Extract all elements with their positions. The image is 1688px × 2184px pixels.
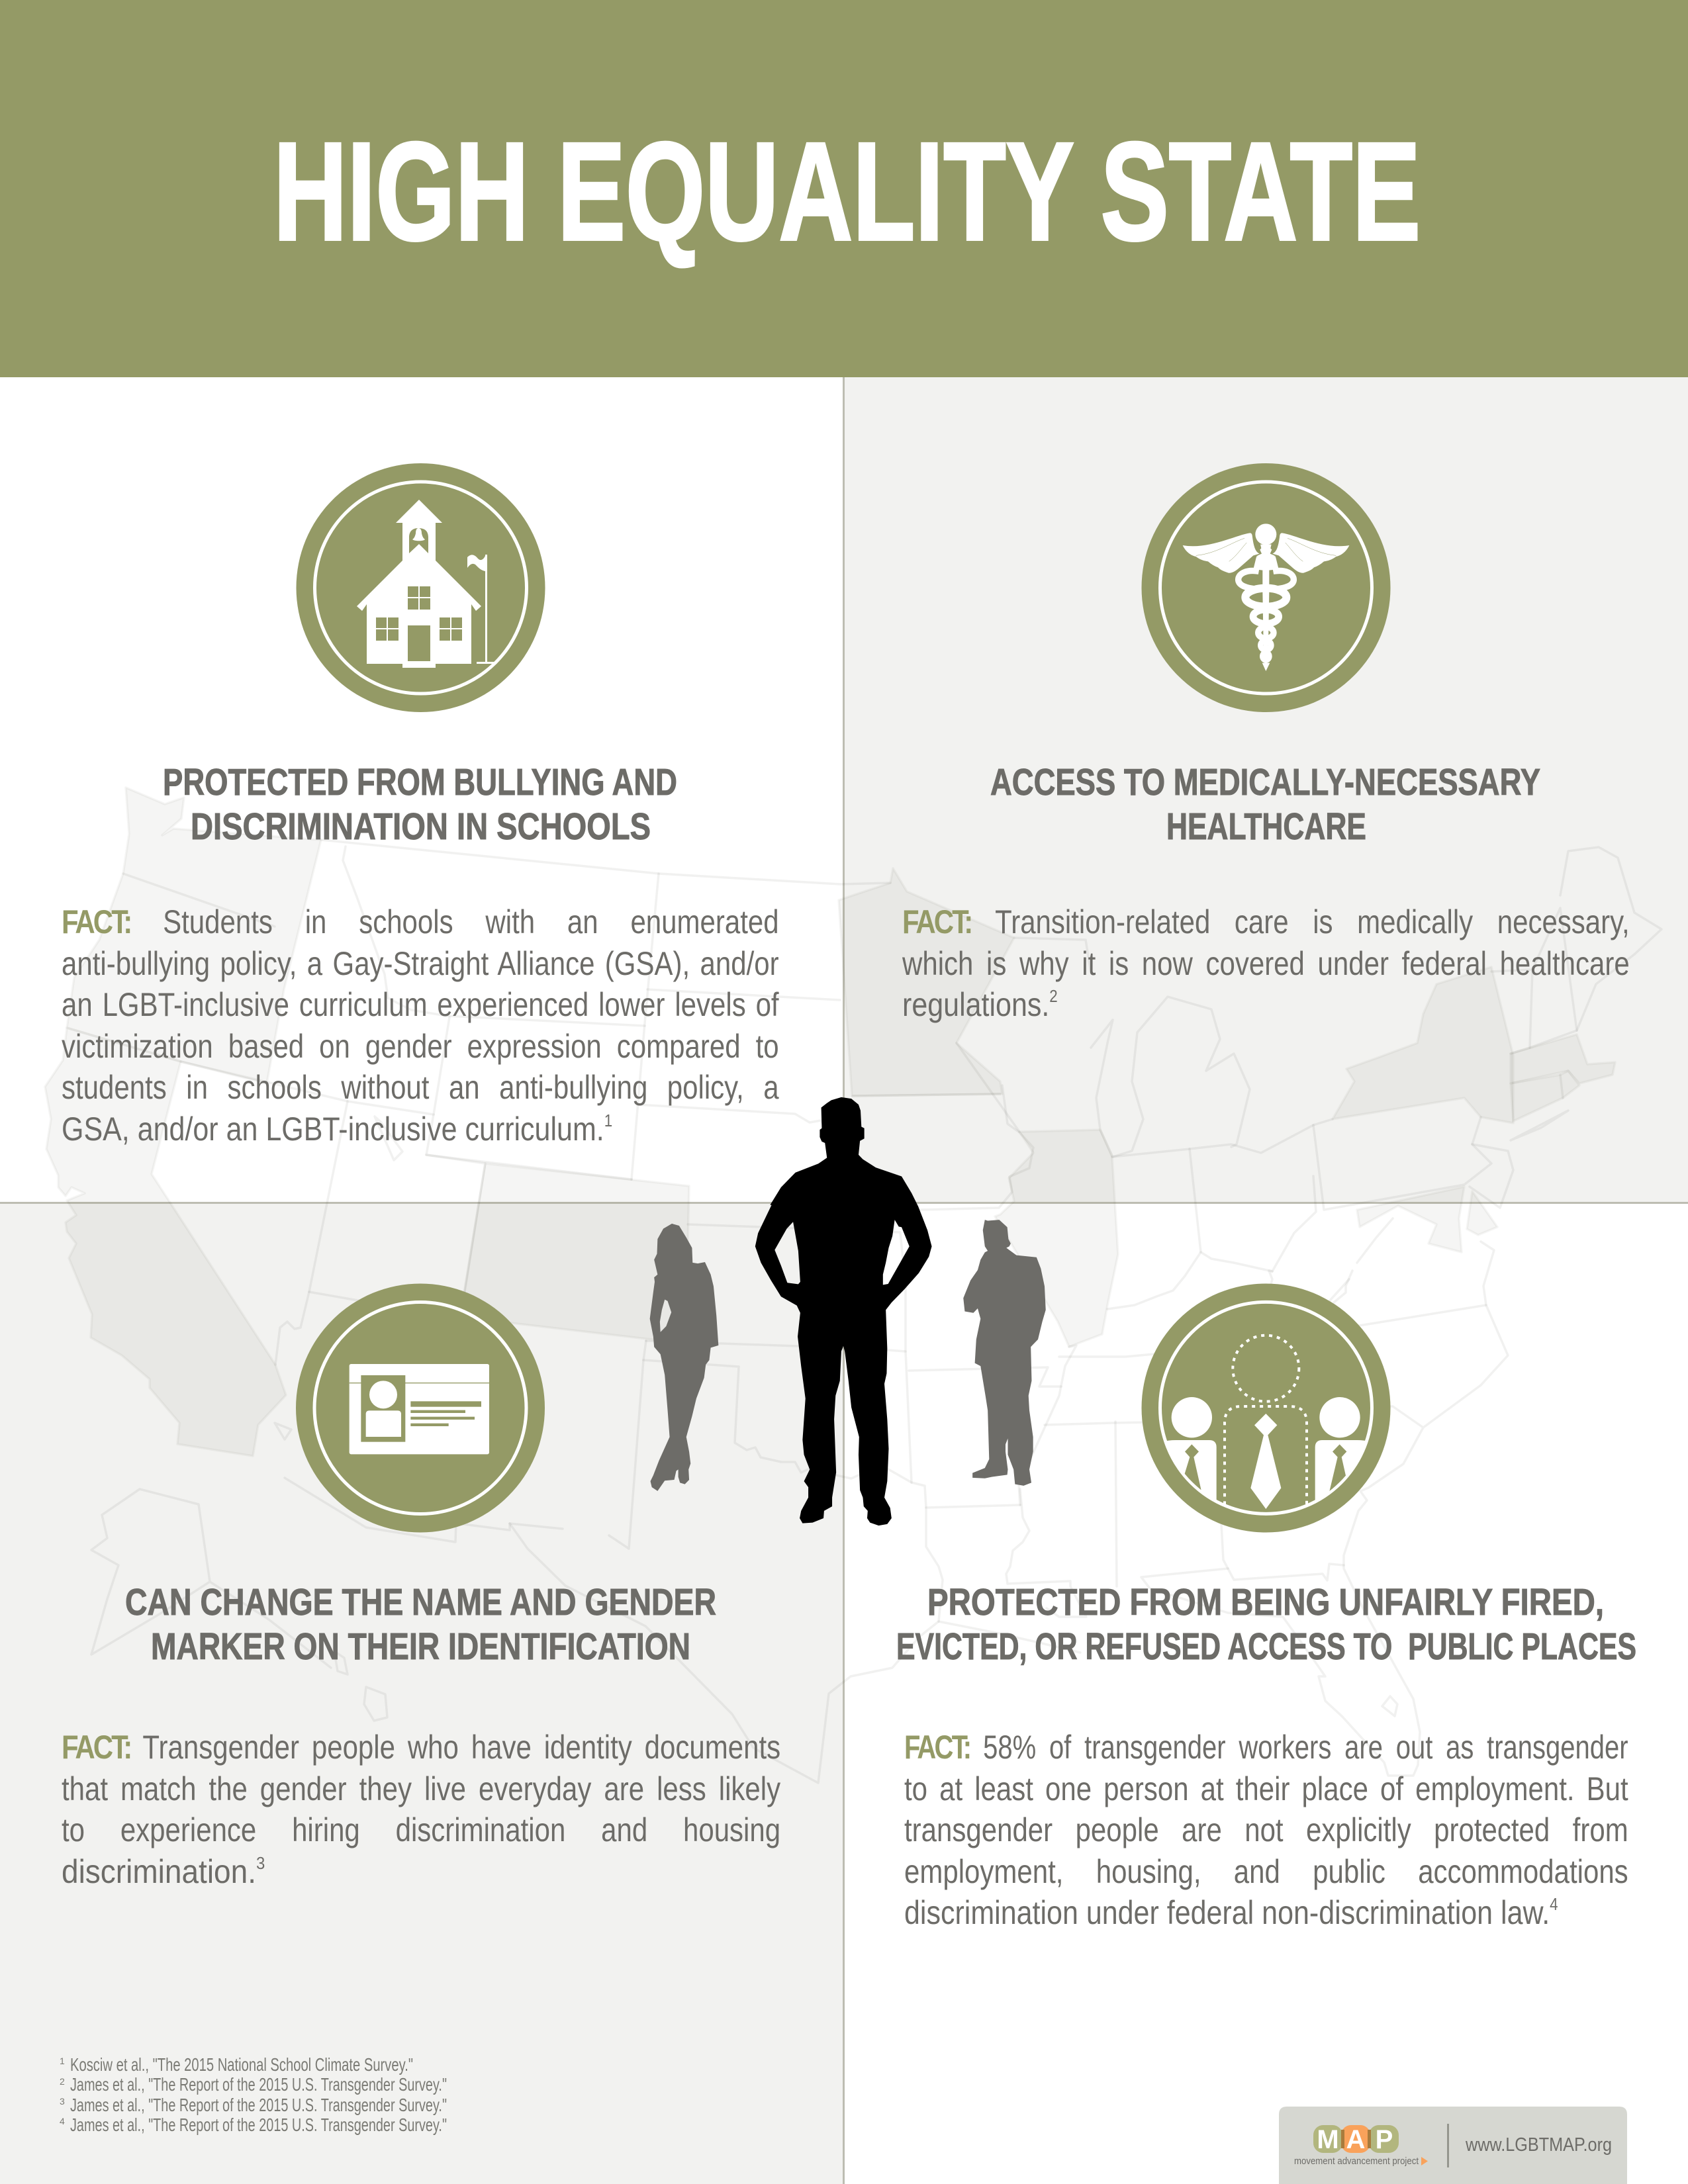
heading: healthcare: [990, 761, 1540, 848]
text block: schools fact: GSA, and/or an LGBT-inclusive curriculum.1: [62, 1111, 612, 1148]
text block: schools fact: an LGBT-inclusive curriculum experienced lower levels of: [62, 986, 779, 1023]
logo panel: movement advancement project: [1294, 2156, 1419, 2167]
silhouette: central man: [755, 1097, 932, 1525]
text block: employment fact: to at least one person at their place of employment. But: [904, 1770, 1628, 1807]
panel: identification background: [0, 1203, 844, 2184]
vertical panel divider: [843, 377, 845, 2184]
text block: identification fact: that match the gender they live everyday are less likely: [62, 1770, 780, 1807]
footnotes: 3: [60, 2096, 65, 2107]
footnotes: James et al., "The Report of the 2015 U.S. Transgender Survey.": [70, 2074, 447, 2095]
footnotes: [60, 2054, 447, 2135]
highlighted states: [45, 788, 1615, 1456]
text block: schools fact: FACT: Students in schools with an enumerated: [62, 903, 779, 940]
silhouette: man on phone: [963, 1220, 1046, 1486]
logo panel: P: [1376, 2125, 1393, 2154]
logo panel: [1279, 2107, 1627, 2184]
text block: identification fact: [62, 1729, 780, 1890]
text block: employment fact: FACT: 58% of transgender workers are out as transgender: [904, 1729, 1628, 1766]
icon: workers with tie: [1141, 1284, 1390, 1533]
text block: employment fact: transgender people are not explicitly protected from: [904, 1811, 1628, 1848]
heading: identification: CAN CHANGE THE NAME AND GENDER: [125, 1581, 716, 1623]
text block: identification fact: FACT: Transgender people who have identity documents: [62, 1729, 780, 1766]
text block: healthcare fact: which is why it is now covered under federal healthcare: [902, 945, 1630, 982]
heading: schools: [163, 761, 677, 848]
silhouette: woman: [650, 1224, 718, 1491]
text block: healthcare fact: FACT: Transition-related care is medically necessary,: [902, 903, 1630, 940]
logo panel: www.LGBTMAP.org: [1465, 2134, 1612, 2156]
heading: schools: PROTECTED FROM BULLYING AND: [163, 761, 677, 803]
icon: identification card: [296, 1284, 545, 1533]
text block: schools fact: [62, 903, 779, 1148]
text block: schools fact: anti-bullying policy, a Gay-Straight Alliance (GSA), and/or: [62, 945, 779, 982]
text block: healthcare fact: regulations.2: [902, 986, 1058, 1023]
footnotes: 1: [60, 2056, 65, 2066]
heading: identification: MARKER ON THEIR IDENTIFICATION: [151, 1625, 690, 1668]
footnotes: James et al., "The Report of the 2015 U.S. Transgender Survey.": [70, 2115, 447, 2135]
horizontal panel divider: [0, 1202, 1688, 1204]
logo panel: A: [1346, 2125, 1365, 2154]
footnotes: Kosciw et al., "The 2015 National School Climate Survey.": [70, 2054, 413, 2075]
text block: identification fact: discrimination.3: [62, 1853, 265, 1890]
text block: employment fact: [904, 1729, 1628, 1931]
heading: healthcare: ACCESS TO MEDICALLY-NECESSARY: [990, 761, 1540, 803]
footnotes: James et al., "The Report of the 2015 U.S. Transgender Survey.": [70, 2095, 447, 2115]
heading: schools: DISCRIMINATION IN SCHOOLS: [191, 805, 651, 848]
footnotes: 4: [60, 2116, 65, 2126]
text block: schools fact: students in schools without an anti-bullying policy, a: [62, 1069, 779, 1106]
heading: healthcare: HEALTHCARE: [1166, 805, 1366, 848]
text block: healthcare fact: [902, 903, 1630, 1023]
heading: employment: [896, 1581, 1636, 1668]
text block: identification fact: to experience hiring discrimination and housing: [62, 1811, 780, 1848]
text block: employment fact: discrimination under federal non-discrimination law.4: [904, 1894, 1558, 1931]
state outlines: [91, 840, 1662, 1783]
panel: employment background: [844, 1203, 1688, 2184]
panel: healthcare background: [844, 377, 1688, 1203]
header band: [0, 0, 1688, 377]
heading: identification: [125, 1581, 716, 1668]
icon: caduceus: [1141, 463, 1390, 712]
icon: schoolhouse: [297, 463, 545, 712]
logo panel: M: [1317, 2125, 1339, 2154]
footnotes: 2: [60, 2076, 65, 2087]
text block: employment fact: employment, housing, and public accommodations: [904, 1853, 1628, 1890]
text block: schools fact: victimization based on gender expression compared to: [62, 1027, 779, 1064]
panel: schools background: [0, 377, 844, 1203]
